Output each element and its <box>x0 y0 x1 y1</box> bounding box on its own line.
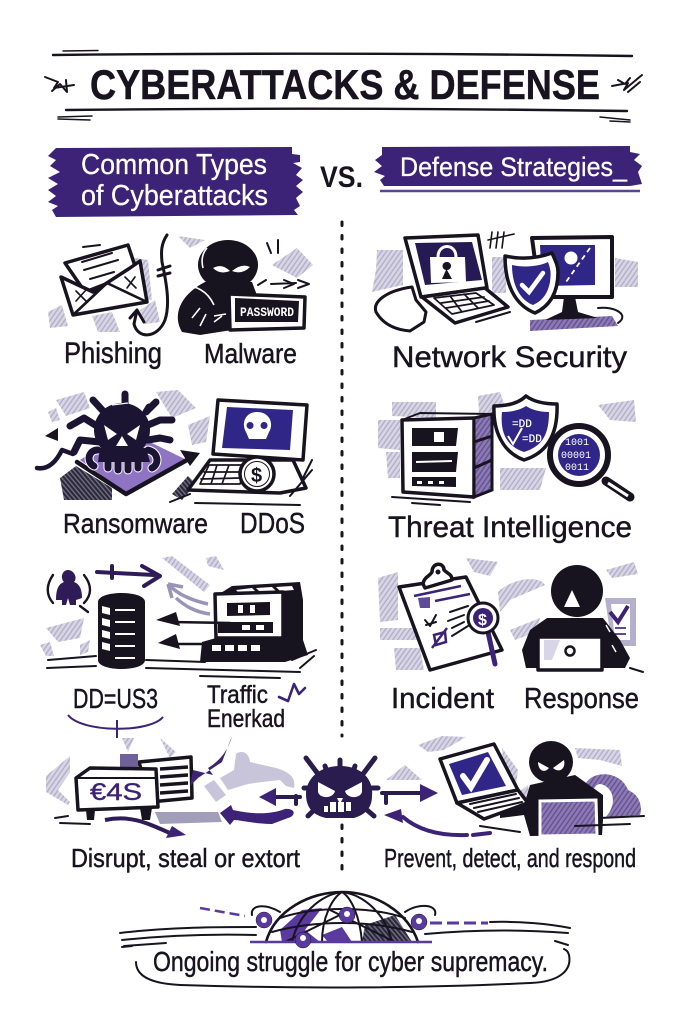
dark curved arrow <box>220 805 294 825</box>
icon: fishing hook <box>130 235 170 335</box>
icon: monitor <box>532 237 622 323</box>
label: dd=us3: DD=US3 <box>73 683 158 714</box>
shield data text 2: =DD <box>522 434 542 446</box>
panel: disrupt illustration <box>46 736 294 838</box>
icon: checklist document <box>605 598 636 646</box>
small arrow <box>271 280 309 288</box>
binary text 2: 00001 <box>561 451 591 462</box>
lower left arrowhead <box>166 826 186 838</box>
panel: traffic attack illustration <box>40 556 316 678</box>
swoop arrow <box>403 817 490 835</box>
swoop arrowhead <box>384 809 403 823</box>
banner text: Defense Strategies_ <box>400 152 628 182</box>
label: traffic enerkad: Traffic <box>207 681 268 709</box>
callout: ongoing struggle <box>136 946 569 987</box>
password text: PASSWORD <box>240 305 294 320</box>
central dotted divider <box>340 222 344 873</box>
icon: person at laptop <box>522 565 643 672</box>
icon: skull laptop <box>170 400 312 505</box>
panel: phishing and malware <box>48 235 313 370</box>
panel: network security <box>372 232 638 374</box>
panel: prevent illustration <box>384 736 644 836</box>
label: incident: Incident <box>391 683 494 715</box>
icon: left lightning <box>45 77 74 92</box>
dollar sign: $ <box>251 465 262 487</box>
arrow: left of skull <box>272 796 300 804</box>
icon: lavender swirl <box>584 774 641 817</box>
banner: common types of cyberattacks <box>48 147 303 217</box>
icon: small triangle <box>45 428 58 441</box>
icon: magnifier <box>550 426 630 497</box>
gray flat arrow <box>155 812 222 824</box>
arrow: right of skull <box>382 793 422 803</box>
left motion lines <box>120 927 256 947</box>
title text: CYBERATTACKS & DEFENSE <box>90 61 600 108</box>
panel: threat intelligence <box>378 392 636 544</box>
arrowhead: left of skull <box>259 788 276 806</box>
icon: ransomware bug <box>70 394 172 470</box>
label: traffic enerkad <box>207 681 285 733</box>
icon: server stack <box>200 582 308 662</box>
purple dashes right <box>430 922 488 924</box>
icon: purple cube <box>120 754 138 767</box>
magnifier dollar: $ <box>478 612 487 629</box>
purple slash arrow <box>190 736 232 786</box>
icon: purple diamond <box>80 430 187 493</box>
banner text line 1: Common Types <box>81 149 267 181</box>
title <box>53 50 632 122</box>
icon: clipboard magnifier <box>468 603 498 664</box>
attack arrow lower <box>172 643 210 645</box>
arrowhead: right of skull <box>420 784 438 802</box>
icon: traffic zigzag <box>279 684 305 701</box>
icon: data shield <box>494 396 557 460</box>
attack arrowhead lower <box>158 634 180 649</box>
banner: defense strategies <box>374 146 642 191</box>
icon: box <box>55 768 158 824</box>
purple arrow <box>97 566 160 586</box>
panel: ransomware and ddos <box>37 390 312 539</box>
icon: check laptop <box>440 744 528 819</box>
banner text line 2: of Cyberattacks <box>81 180 268 212</box>
gray curved arrow <box>168 584 210 614</box>
decorative label marks <box>68 715 163 738</box>
attack arrowhead upper <box>156 612 180 626</box>
label: ddos: DDoS <box>240 508 305 540</box>
label: response: Response <box>524 683 639 715</box>
icon: password sign <box>229 294 305 330</box>
right motion lines <box>425 922 570 945</box>
panel: incident response <box>378 558 643 715</box>
icon: server <box>392 413 492 505</box>
purple network nodes <box>256 907 427 948</box>
label: second line: Enerkad <box>207 705 285 733</box>
purple dashes left <box>200 908 245 916</box>
ground strokes <box>47 650 316 678</box>
callout text: Ongoing struggle for cyber supremacy. <box>153 946 548 977</box>
shield data text: =DD <box>512 419 532 431</box>
icon: clipboard <box>399 564 502 670</box>
binary text 3: 0011 <box>565 463 589 474</box>
icon: hooded hacker <box>178 240 278 335</box>
icon: person <box>48 570 90 612</box>
attack arrow upper <box>172 622 230 623</box>
icon: globe <box>250 892 435 948</box>
icon: laptop with padlock <box>405 235 510 323</box>
icon: envelope <box>61 245 147 315</box>
icon: cloud <box>375 287 426 331</box>
icon: document <box>139 757 192 802</box>
binary text 1: 1001 <box>565 438 589 449</box>
icon: shield with check <box>505 253 558 313</box>
label: network security: Network Security <box>392 341 627 374</box>
lower left arrow <box>105 818 172 834</box>
icon: masked hacker <box>480 741 644 836</box>
icon: database cylinder <box>98 593 145 669</box>
icon: right lightning <box>612 75 642 92</box>
label: ransomware: Ransomware <box>63 508 208 539</box>
icon: ghost shape <box>204 752 294 802</box>
label: malware: Malware <box>204 338 297 369</box>
icon: central virus skull <box>304 758 378 818</box>
label: threat intelligence: Threat Intelligence <box>388 511 632 544</box>
label: phishing: Phishing <box>64 337 162 370</box>
icon: tail arrow <box>37 450 73 468</box>
vs label: VS. <box>320 161 363 194</box>
box text: €4S <box>90 779 142 806</box>
label: disrupt, steal or extort: Disrupt, steal or extort <box>71 843 301 873</box>
